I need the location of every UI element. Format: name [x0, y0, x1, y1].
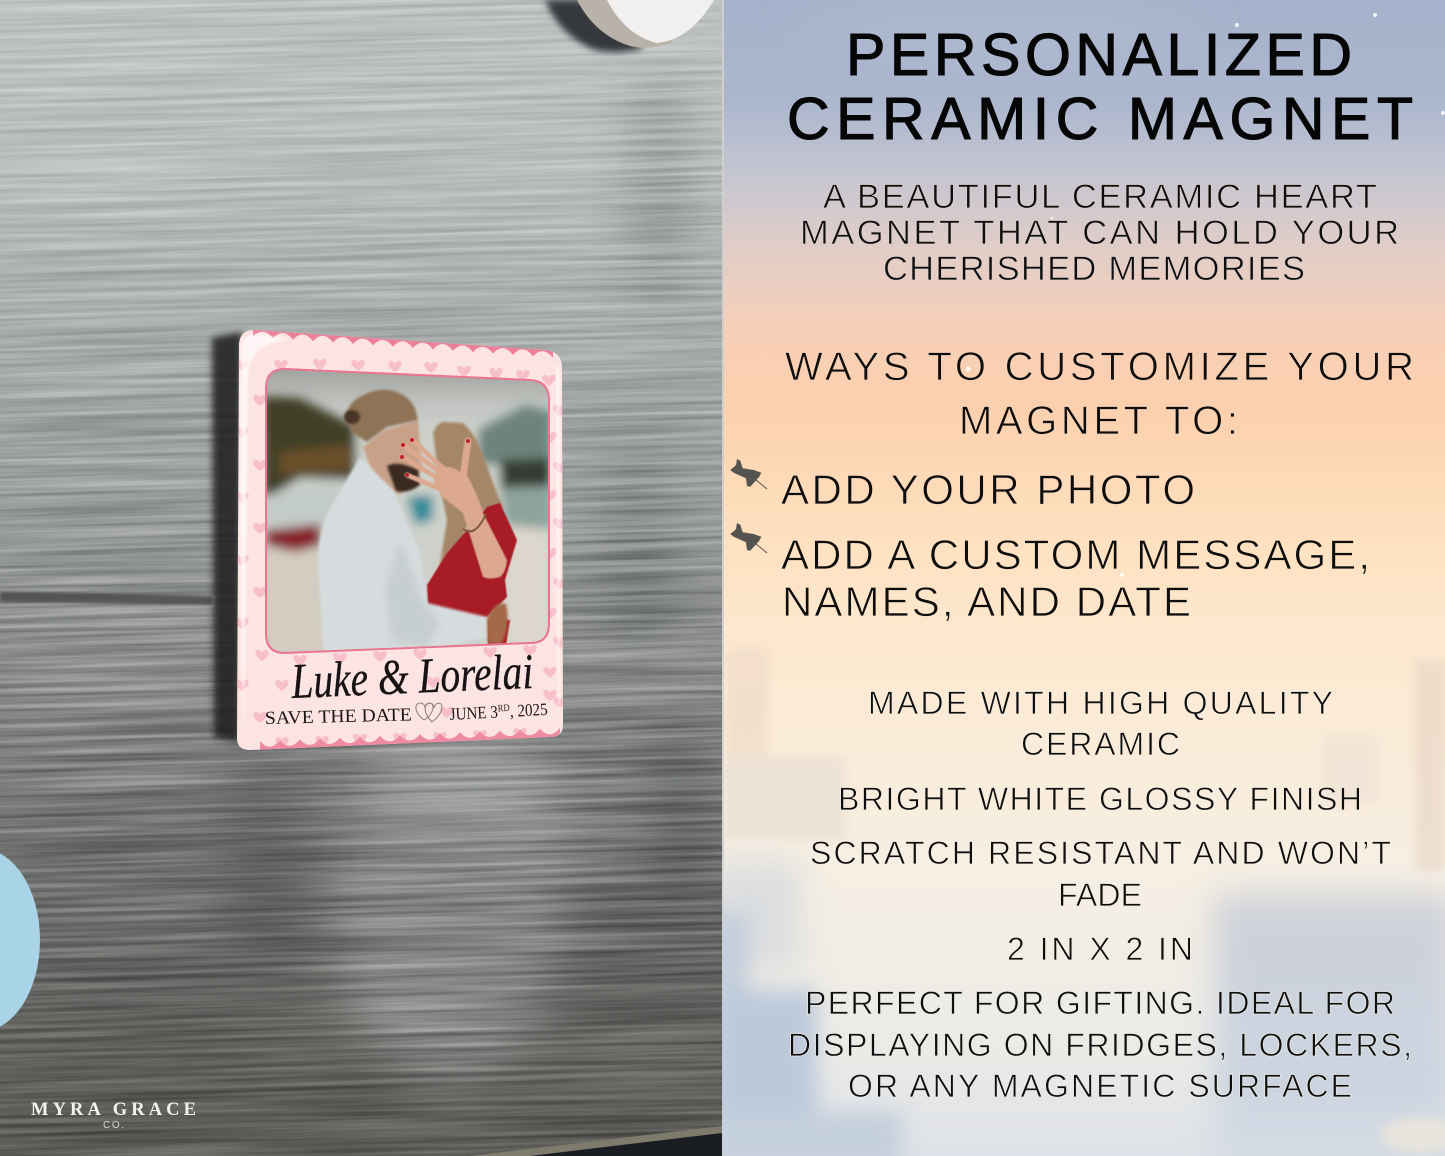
save the date text: SAVE THE DATE: [265, 705, 412, 729]
customize heading: MAGNET TO:: [959, 399, 1238, 443]
heart pattern: [235, 359, 567, 748]
man hand: [487, 603, 508, 645]
subtitle: CHERISHED MEMORIES: [883, 250, 1305, 288]
glossy highlight: [240, 334, 290, 735]
scalloped bottom border: [260, 728, 560, 752]
customization option: message: ADD A CUSTOM MESSAGE,: [781, 531, 1370, 578]
wedding date: RD: [497, 703, 510, 714]
customization option: photo: ADD YOUR PHOTO: [781, 466, 1195, 513]
title: PERSONALIZED: [846, 22, 1352, 88]
blue round magnet: [0, 849, 40, 1031]
stars: [966, 13, 1445, 577]
icon: push pin: [730, 459, 767, 489]
engagement photo: [260, 365, 555, 660]
double heart outline: [416, 703, 442, 722]
logo: Myra Grace Co.: [31, 1100, 196, 1131]
man neck and face: [363, 420, 422, 495]
man hair bun: [344, 410, 360, 424]
red nails: [400, 438, 470, 477]
couple names: Luke & Lorelai: [289, 643, 534, 709]
logo: Myra Grace Co.: MYRA GRACE: [31, 1100, 196, 1120]
red dress: [427, 503, 517, 645]
customization option: message: [730, 523, 1370, 625]
feature: durability: FADE: [1058, 877, 1142, 913]
background: brushed steel fridge panel: [0, 0, 778, 1156]
woman hair: [433, 422, 503, 583]
feature: gifting: PERFECT FOR GIFTING. IDEAL FOR: [805, 985, 1395, 1021]
feature: ceramic: MADE WITH HIGH QUALITY: [868, 685, 1333, 721]
woman arm and hand: [402, 440, 507, 578]
magnet shadow: [212, 332, 242, 742]
feature: gifting: OR ANY MAGNETIC SURFACE: [848, 1068, 1352, 1104]
feature: finish: BRIGHT WHITE GLOSSY FINISH: [838, 781, 1362, 817]
feature list: [788, 685, 1412, 1104]
title: CERAMIC MAGNET: [787, 86, 1413, 152]
background: pastel sky panel: [710, 0, 1445, 1156]
bracelet: [463, 514, 486, 531]
photo frame: [267, 370, 548, 652]
title: [787, 22, 1413, 152]
customization option: message: NAMES, AND DATE: [782, 578, 1191, 625]
white round magnet at the top: [545, 0, 714, 52]
wedding date: , 2025: [509, 699, 548, 721]
man hair: [345, 390, 418, 442]
scalloped top border: [253, 329, 553, 358]
logo: Myra Grace Co.: CO.: [103, 1120, 124, 1131]
subtitle: MAGNET THAT CAN HOLD YOUR: [800, 214, 1399, 252]
ceramic photo magnet: [235, 329, 567, 752]
customize heading: WAYS TO CUSTOMIZE YOUR: [785, 345, 1414, 389]
customize heading: [785, 345, 1414, 443]
feature: durability: SCRATCH RESISTANT AND WON’T: [810, 835, 1391, 871]
feature: gifting: [788, 985, 1412, 1104]
feature: size: 2 IN X 2 IN: [1007, 931, 1193, 967]
subtitle: A BEAUTIFUL CERAMIC HEART: [823, 178, 1377, 216]
man beard: [387, 464, 420, 492]
wedding date: JUNE 3: [449, 701, 506, 724]
man shirt: [318, 457, 487, 652]
feature: ceramic: CERAMIC: [1021, 726, 1180, 762]
feature: durability: [810, 835, 1391, 913]
icon: push pin: [730, 523, 767, 553]
feature: ceramic: [868, 685, 1333, 762]
feature: gifting: DISPLAYING ON FRIDGES, LOCKERS,: [788, 1027, 1412, 1063]
subtitle: [800, 178, 1399, 288]
